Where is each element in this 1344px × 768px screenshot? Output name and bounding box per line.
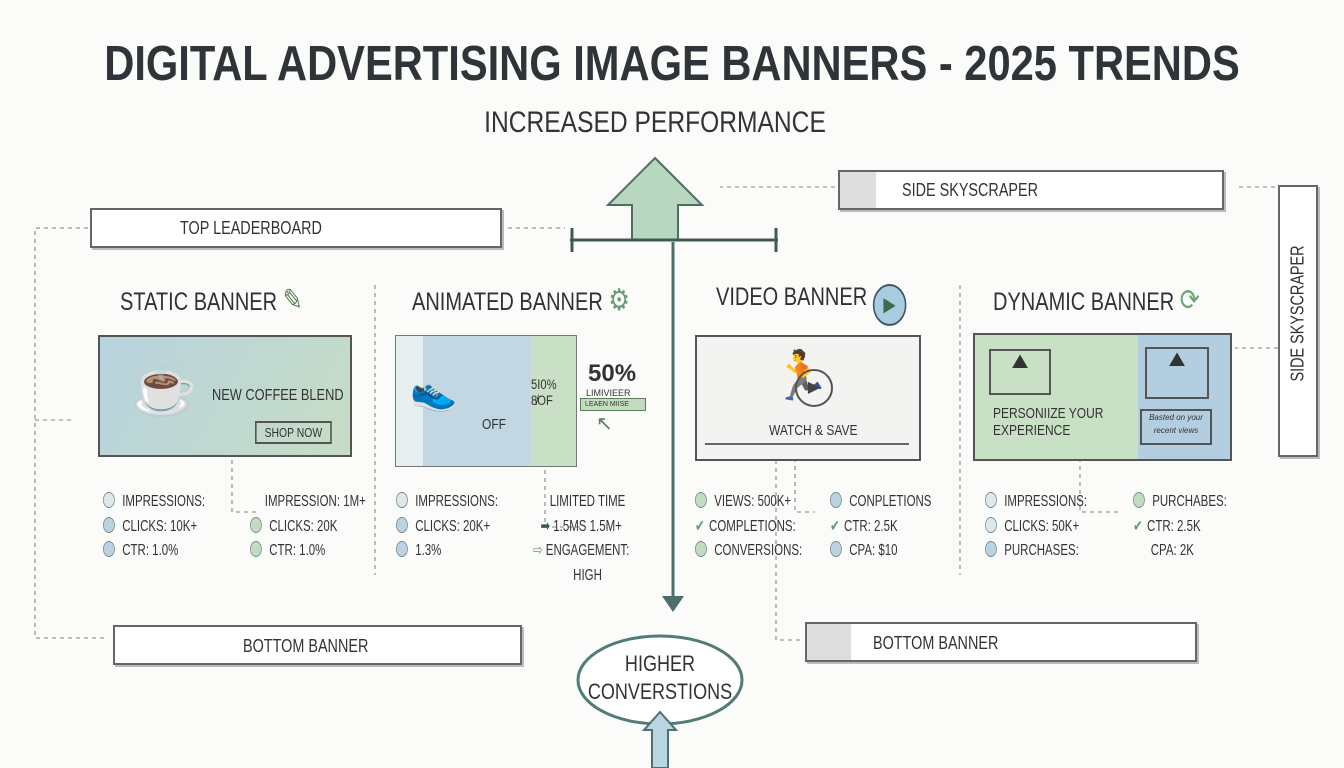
stats static: CLICKS: 10K+ — [122, 518, 197, 534]
top leaderboard — [90, 208, 502, 248]
stats static 2: CLICKS: 20K — [269, 518, 337, 534]
stats animated 2: HIGH — [573, 566, 602, 584]
side skyscraper vertical — [1278, 185, 1318, 457]
dynamic banner: Basted on your recent views — [1149, 413, 1203, 435]
title: DIGITAL ADVERTISING IMAGE BANNERS - 2025 TRENDS — [104, 37, 1240, 91]
stats animated 2: ⇨ ENGAGEMENT: — [533, 542, 629, 559]
stats static: CTR: 1.0% — [122, 542, 178, 559]
animated banner: 👟 — [410, 371, 457, 413]
stats animated 2: LIMITED TIME — [550, 493, 625, 510]
stats video 2: CPA: $10 — [849, 542, 897, 559]
stats dynamic 2 — [1133, 492, 1227, 559]
stats animated: IMPRESSIONS: — [415, 493, 498, 510]
bottom banner left: BOTTOM BANNER — [243, 636, 368, 656]
heading video — [716, 283, 906, 326]
dynamic banner — [973, 333, 1232, 461]
video banner — [695, 335, 921, 461]
side skyscraper horizontal: SIDE SKYSCRAPER — [902, 180, 1038, 200]
stats animated — [396, 492, 498, 559]
heading video: ▶ — [883, 294, 896, 316]
video banner: WATCH & SAVE — [769, 422, 857, 439]
ellipse — [578, 636, 742, 768]
bottom banner right: BOTTOM BANNER — [873, 633, 998, 653]
stats dynamic — [985, 492, 1087, 559]
stats animated: 1.3% — [415, 542, 441, 559]
dynamic banner: ⛰ — [1012, 351, 1028, 373]
ellipse label: HIGHER — [625, 651, 695, 676]
static banner: NEW COFFEE BLEND — [212, 387, 344, 404]
heading dynamic: DYNAMIC BANNER ⟳ — [993, 284, 1200, 317]
stats video: CONVERSIONS: — [714, 542, 802, 559]
heading animated: ANIMATED BANNER ⚙ — [412, 284, 630, 317]
dynamic banner: EXPERIENCE — [993, 422, 1070, 439]
stats animated: CLICKS: 20K+ — [415, 518, 490, 534]
static banner — [98, 335, 352, 457]
top leaderboard: TOP LEADERBOARD — [180, 218, 322, 238]
heading static: STATIC BANNER ✎ — [120, 284, 303, 317]
bottom banner right — [805, 622, 1197, 662]
stats dynamic: IMPRESSIONS: — [1004, 493, 1087, 510]
stats video 2: ✔ CTR: 2.5K — [830, 518, 898, 534]
dynamic banner: ⛰ — [1169, 349, 1185, 371]
stats dynamic 2: CPA: 2K — [1151, 542, 1194, 559]
stats dynamic: CLICKS: 50K+ — [1004, 518, 1079, 534]
big up arrow — [570, 158, 778, 252]
stats static 2 — [250, 493, 366, 559]
stats static — [103, 492, 205, 559]
stats dynamic 2: PURCHABES: — [1152, 493, 1227, 510]
stats video: VIEWS: 500K+ — [714, 493, 791, 510]
side skyscraper horizontal — [838, 170, 1224, 210]
video banner: ▶ — [808, 379, 820, 396]
heading video: VIDEO BANNER — [716, 283, 867, 311]
ellipse label — [588, 651, 732, 704]
animated callout: LIMIVIEER — [586, 388, 631, 398]
side skyscraper vertical: SIDE SKYSCRAPER — [1288, 245, 1308, 382]
animated callout: ↖ — [596, 413, 613, 435]
stats video: ✔ COMPLETIONS: — [695, 518, 796, 534]
down arrow — [662, 242, 684, 612]
bottom banner left — [113, 625, 522, 665]
stats animated 2: ➡ 1.5MS 1.5M+ — [540, 518, 622, 534]
dynamic banner: PERSONIIZE YOUR — [993, 405, 1103, 422]
stats static 2: CTR: 1.0% — [269, 542, 325, 559]
animated callout — [580, 360, 646, 435]
stats animated 2 — [533, 493, 629, 584]
stats dynamic: PURCHASES: — [1004, 542, 1079, 559]
stats video 2: CONPLETIONS — [849, 493, 931, 510]
animated callout: LEAEN MIISE — [585, 401, 629, 408]
video banner: 🏃 — [771, 350, 831, 403]
animated banner: OFF — [482, 416, 506, 433]
animated banner — [395, 335, 577, 467]
stats video 2 — [830, 492, 931, 559]
animated banner: 5I0% — [531, 376, 557, 392]
ellipse label: CONVERSTIONS — [588, 679, 732, 704]
stats video — [695, 492, 802, 559]
static banner: SHOP NOW — [265, 425, 322, 440]
static banner: ☕ — [130, 358, 197, 418]
animated callout: 50% — [588, 360, 636, 387]
subtitle: INCREASED PERFORMANCE — [484, 106, 826, 139]
stats static 2: IMPRESSION: 1M+ — [265, 493, 366, 510]
stats static: IMPRESSIONS: — [122, 493, 205, 510]
stats dynamic 2: ✔ CTR: 2.5K — [1133, 518, 1201, 534]
animated banner: 8̸OF — [531, 392, 553, 408]
